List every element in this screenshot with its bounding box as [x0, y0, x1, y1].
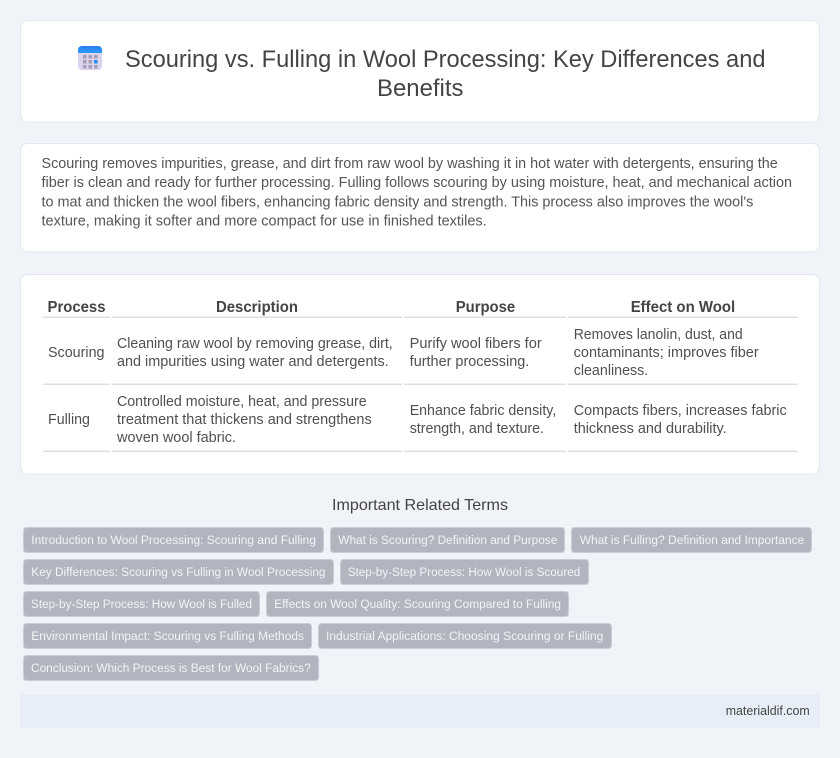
- table row: scouring: contaminants; improves fiber: [574, 345, 759, 361]
- table row: scouring: cleanliness.: [574, 363, 648, 379]
- tag list: related terms: [24, 528, 812, 680]
- table row: scouring: and impurities using water and detergents.: [117, 354, 389, 370]
- panel: comparison table: [20, 274, 820, 474]
- title: [125, 46, 766, 102]
- footer: [20, 694, 820, 728]
- table row: scouring: Removes lanolin, dust, and: [574, 327, 743, 343]
- tag list: related terms: Key Differences: Scouring vs Fulling in Wool Processing: [31, 565, 326, 579]
- text block: introduction paragraph: to mat and thicken the wool fibers, enhancing fabric density and strength. This process also improves the wool's: [42, 194, 753, 210]
- title: Scouring vs. Fulling in Wool Processing: Key Differences and: [125, 46, 766, 73]
- table row: fulling: treatment that thickens and strengthens: [117, 412, 372, 428]
- tag list: related terms: Environmental Impact: Scouring vs Fulling Methods: [31, 629, 304, 643]
- table header row: Description: [216, 299, 298, 316]
- table header row: Effect on Wool: [631, 299, 735, 316]
- table row: fulling: thickness and durability.: [574, 421, 727, 437]
- table row: scouring: Scouring: [48, 345, 104, 361]
- tag list: related terms: What is Fulling? Definition and Importance: [580, 533, 805, 547]
- tag list: related terms: Effects on Wool Quality: Scouring Compared to Fulling: [274, 597, 561, 611]
- table row: fulling: strength, and texture.: [410, 421, 544, 437]
- table header row: Purpose: [456, 299, 516, 316]
- table row: fulling: Compacts fibers, increases fabric: [574, 403, 787, 419]
- panel: header: [20, 20, 820, 122]
- table row: scouring: [48, 327, 759, 379]
- title: Benefits: [377, 75, 464, 102]
- tag list: related terms: Step-by-Step Process: How Wool is Scoured: [348, 565, 580, 579]
- panel: introduction: [20, 144, 820, 252]
- text block: introduction paragraph: fiber is clean and ready for further processing. Fulling follows scouring by using moisture, heat, and mechanical action: [42, 175, 792, 191]
- text block: introduction paragraph: texture, making it softer and more compact for use in finished textiles.: [42, 214, 487, 230]
- text block: introduction paragraph: Scouring removes impurities, grease, and dirt from raw wool by washing it in hot water with detergents, ensuring the: [42, 156, 778, 172]
- text block: introduction paragraph: [42, 156, 792, 230]
- tag list: related terms: Step-by-Step Process: How Wool is Fulled: [31, 597, 252, 611]
- table row: scouring: Purify wool fibers for: [410, 336, 542, 352]
- table row: fulling: Controlled moisture, heat, and pressure: [117, 394, 367, 410]
- tag list: related terms: Conclusion: Which Process is Best for Wool Fabrics?: [31, 661, 311, 675]
- table row: scouring: Cleaning raw wool by removing grease, dirt,: [117, 336, 393, 352]
- table row: fulling: [48, 394, 787, 446]
- tag list: related terms: Industrial Applications: Choosing Scouring or Fulling: [326, 629, 603, 643]
- icon: calendar: [78, 46, 102, 70]
- table row: fulling: woven wool fabric.: [116, 430, 236, 446]
- tag list: related terms: Introduction to Wool Processing: Scouring and Fulling: [31, 533, 316, 547]
- table row: fulling: Fulling: [48, 412, 90, 428]
- footer source text: materialdif.com: [726, 704, 810, 718]
- tag list: related terms: What is Scouring? Definition and Purpose: [338, 533, 558, 547]
- table row: fulling: Enhance fabric density,: [410, 403, 556, 419]
- table header row: Process: [48, 299, 106, 316]
- table header row: [48, 299, 735, 316]
- heading: important related terms: Important Related Terms: [332, 497, 508, 514]
- table row: scouring: further processing.: [410, 354, 529, 370]
